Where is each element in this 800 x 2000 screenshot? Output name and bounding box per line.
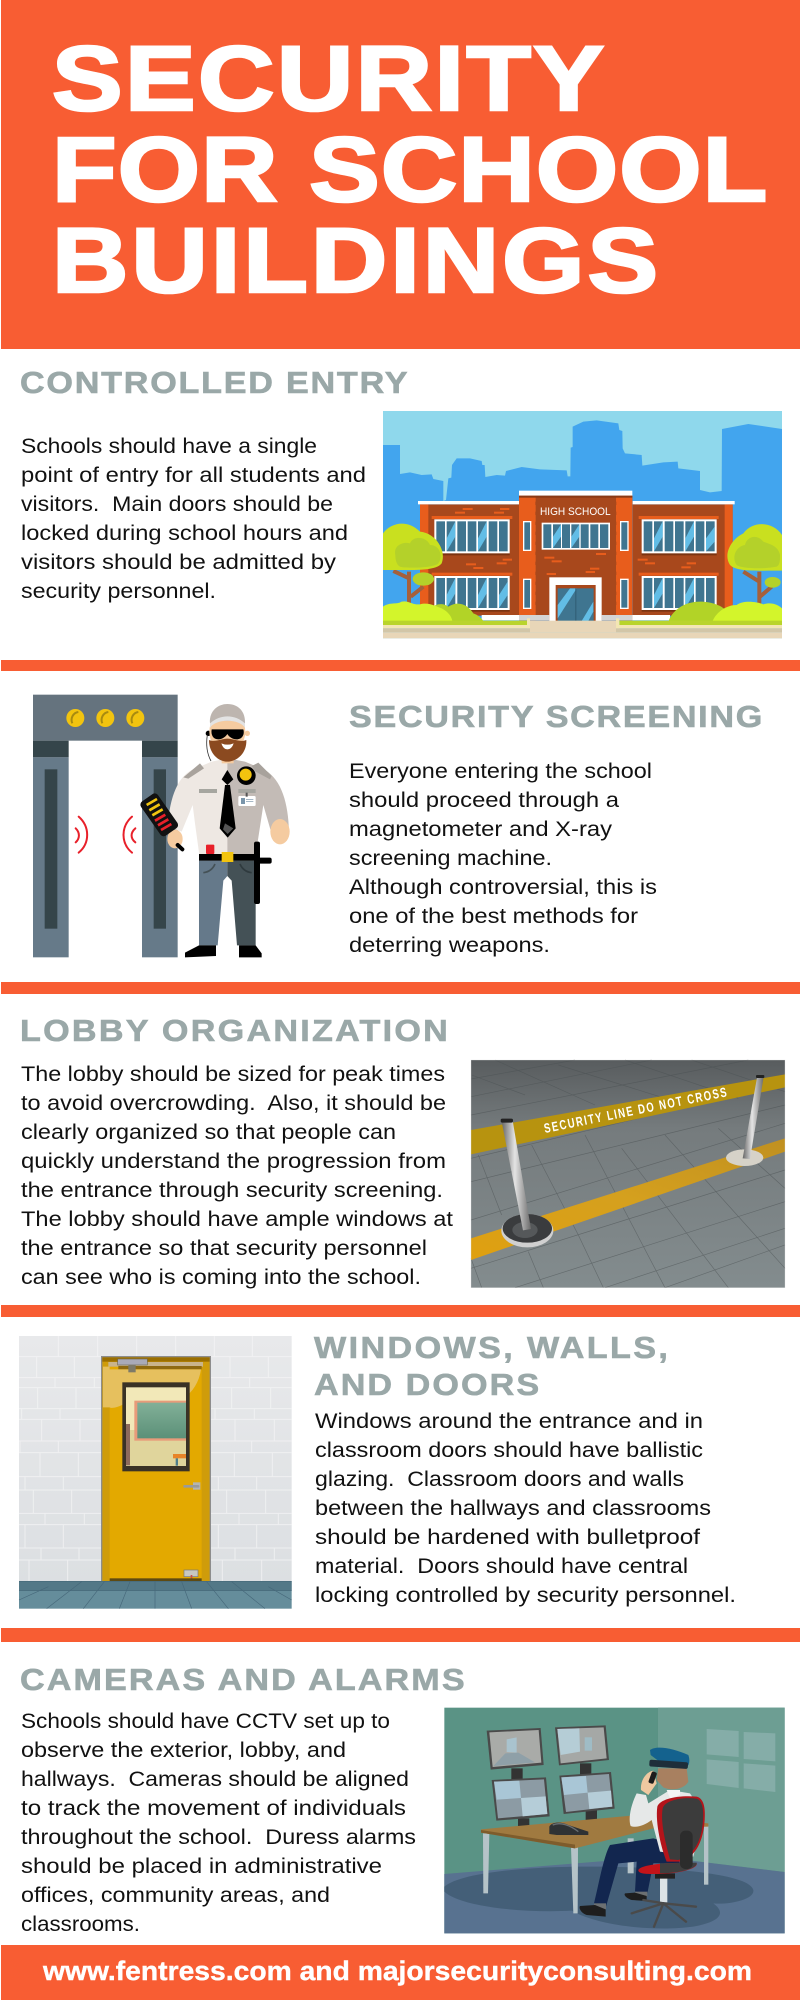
illustration: metal detector gate and security guard	[33, 695, 290, 957]
text: security screening: deterring weapons.	[349, 934, 550, 957]
illustration: high school building	[383, 411, 782, 638]
text: lobby organization	[21, 1063, 453, 1289]
text: security screening: should proceed through a	[349, 789, 619, 812]
heading: security screening: SECURITY SCREENING	[349, 700, 762, 734]
text: controlled entry: point of entry for all students and	[21, 464, 366, 487]
divider bar	[1, 660, 800, 671]
CCTV monitors	[487, 1725, 615, 1827]
text: cameras and alarms: Schools should have CCTV set up to	[21, 1710, 390, 1733]
text: security screening	[349, 760, 657, 957]
metal detector gate	[33, 695, 178, 957]
heading: windows, walls, and doors: WINDOWS, WALLS,	[314, 1331, 668, 1365]
divider bar	[1, 982, 800, 994]
desk	[481, 1816, 708, 1913]
text: controlled entry: visitors should be admitted by	[21, 551, 337, 574]
heading: windows, walls, and doors	[314, 1331, 668, 1402]
text: cameras and alarms: offices, community areas, and	[21, 1884, 330, 1907]
heading: controlled entry: CONTROLLED ENTRY	[20, 366, 408, 400]
text: lobby organization: to avoid overcrowding. Also, it should be	[21, 1092, 446, 1115]
text: lobby organization: The lobby should be sized for peak times	[21, 1063, 445, 1086]
text: windows, walls, and doors: Windows around the entrance and in	[315, 1410, 703, 1433]
illustration: school door in brick wall	[19, 1336, 292, 1609]
heading: lobby organization: LOBBY ORGANIZATION	[20, 1014, 448, 1048]
text: security screening: one of the best methods for	[349, 905, 638, 928]
guard at desk	[580, 1748, 705, 1927]
text: windows, walls, and doors: material. Doors should have central	[315, 1555, 688, 1578]
text: windows, walls, and doors: locking controlled by security personnel.	[315, 1584, 736, 1607]
title banner: FOR SCHOOL	[52, 118, 767, 221]
footer banner	[1, 1945, 800, 2000]
text: security screening: Although controversial, this is	[349, 876, 657, 899]
text: security screening: magnetometer and X-ray	[349, 818, 613, 841]
text: cameras and alarms: throughout the school. Duress alarms	[21, 1826, 416, 1849]
title banner: BUILDINGS	[52, 209, 658, 312]
title banner	[1, 0, 800, 349]
text: lobby organization: can see who is coming into the school.	[21, 1266, 421, 1289]
illustration: high school building: HIGH SCHOOL	[540, 506, 611, 518]
text: cameras and alarms: classrooms.	[21, 1913, 140, 1936]
divider bar	[1, 1628, 800, 1642]
footer banner: www.fentress.com and majorsecurityconsulting.com	[42, 1956, 752, 1986]
text: lobby organization: clearly organized so that people can	[21, 1121, 396, 1144]
illustration: guard watching CCTV monitors	[444, 1708, 785, 1933]
image: security line barrier on tiled floor	[471, 1060, 785, 1288]
text: controlled entry: Schools should have a single	[21, 435, 317, 458]
text: windows, walls, and doors: should be hardened with bulletproof	[315, 1526, 700, 1549]
text: lobby organization: quickly understand the progression from	[21, 1150, 446, 1173]
text: cameras and alarms: hallways. Cameras should be aligned	[21, 1768, 409, 1791]
text: controlled entry: security personnel.	[21, 580, 216, 603]
text: lobby organization: the entrance so that security personnel	[21, 1237, 427, 1260]
security guard	[139, 704, 290, 957]
text: cameras and alarms: observe the exterior, lobby, and	[21, 1739, 346, 1762]
text: windows, walls, and doors: classroom doors should have ballistic	[315, 1439, 703, 1462]
text: security screening: Everyone entering the school	[349, 760, 652, 783]
text: windows, walls, and doors: between the hallways and classrooms	[315, 1497, 711, 1520]
text: cameras and alarms	[21, 1710, 416, 1936]
text: security screening: screening machine.	[349, 847, 552, 870]
divider bar	[1, 1305, 800, 1317]
text: lobby organization: the entrance through security screening.	[21, 1179, 443, 1202]
text: controlled entry: locked during school hours and	[21, 522, 348, 545]
text: cameras and alarms: to track the movement of individuals	[21, 1797, 406, 1820]
text: controlled entry: visitors. Main doors should be	[21, 493, 333, 516]
text: cameras and alarms: should be placed in administrative	[21, 1855, 382, 1878]
text: windows, walls, and doors: glazing. Classroom doors and walls	[315, 1468, 684, 1491]
text: windows, walls, and doors	[315, 1410, 736, 1607]
text: lobby organization: The lobby should have ample windows at	[21, 1208, 453, 1231]
image: security line barrier on tiled floor: SECURITY LINE DO NOT CROSS	[543, 1085, 728, 1136]
title banner: SECURITY	[52, 27, 604, 130]
heading: windows, walls, and doors: AND DOORS	[314, 1368, 539, 1402]
heading: cameras and alarms: CAMERAS AND ALARMS	[20, 1663, 465, 1697]
text: controlled entry	[21, 435, 366, 603]
